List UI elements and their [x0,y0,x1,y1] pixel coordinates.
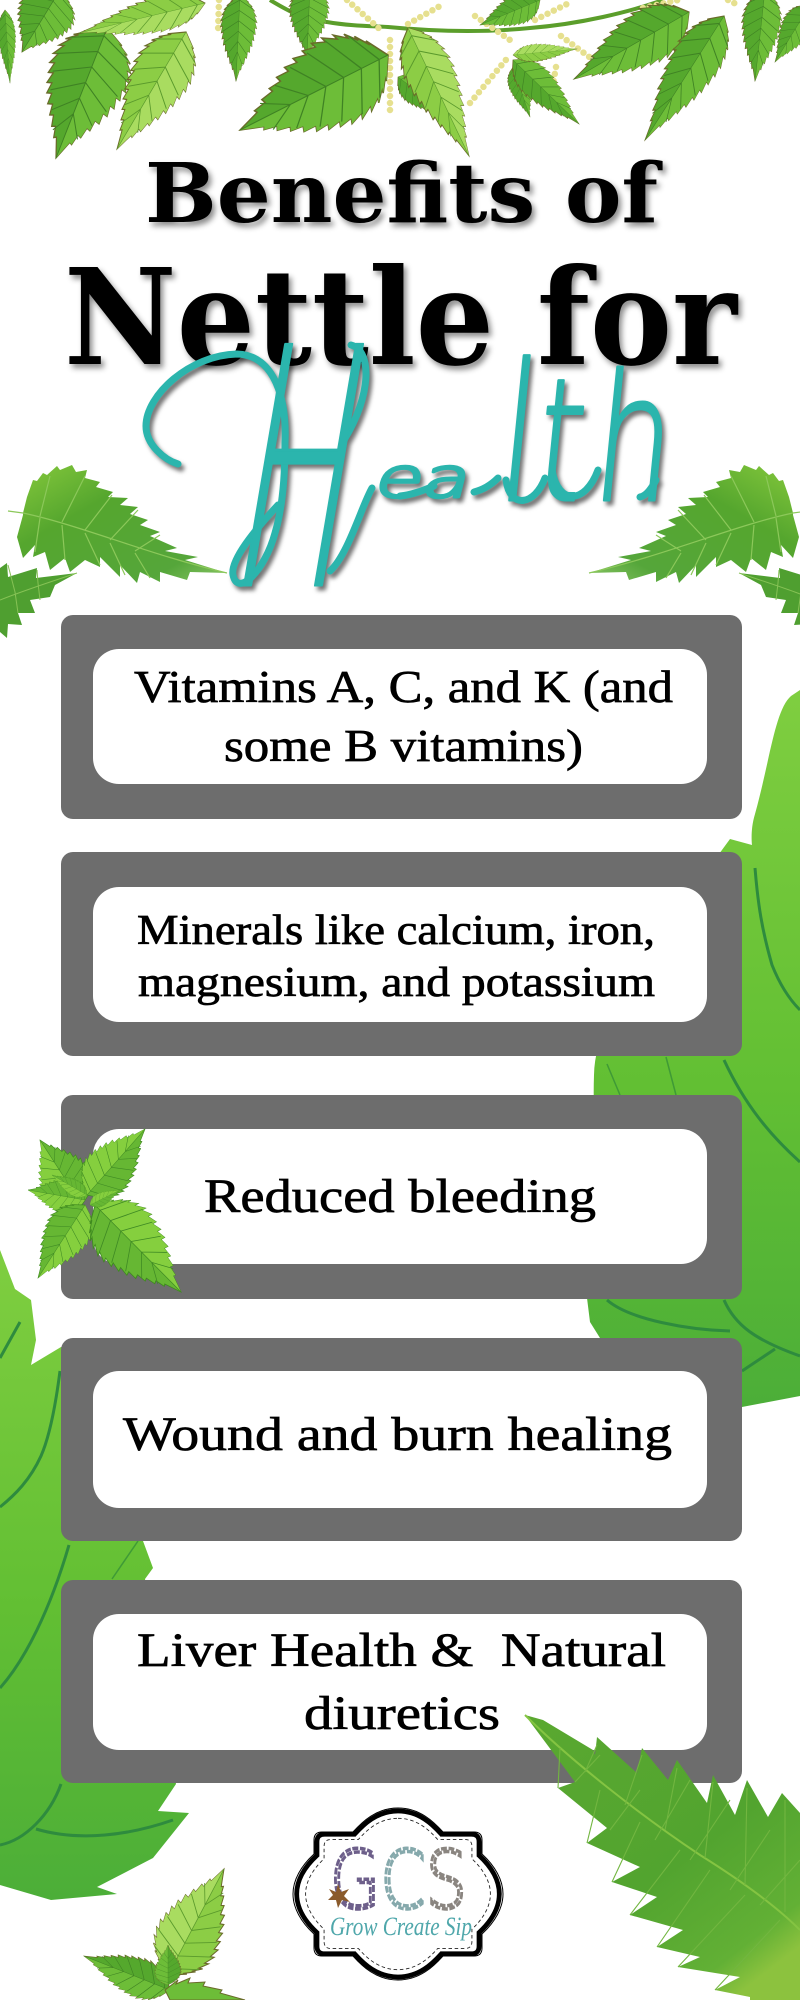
panel: liver health: diuretics [304,1687,500,1740]
panel: vitamins [61,615,742,819]
badge dashed ring [306,1818,490,1970]
side nettle leaves: right [589,465,800,638]
panel: wound healing [61,1338,742,1541]
logo tagline: Grow Create Sip [330,1912,472,1941]
side nettle leaves: left [0,465,227,638]
panel: minerals: Minerals like calcium, iron, [137,908,655,954]
big flat leaf: left [0,1250,189,1900]
top garland of nettle leaves [0,0,800,173]
panel: reduced bleeding: Reduced bleeding [204,1170,596,1223]
panel: minerals: magnesium, and potassium [138,960,655,1006]
panel: vitamins: Vitamins A, C, and K (and [134,661,673,712]
panel: reduced bleeding [61,1095,742,1299]
title line: Nettle for: Nettle for [64,240,739,396]
ea: ea [369,446,480,510]
badge thick ring [297,1811,499,1977]
stem [270,0,663,31]
script word: Health [146,279,685,663]
flower clusters [218,0,738,115]
mint sprig: bottom left [77,1854,253,2000]
photo nettle leaf: bottom right [525,1715,800,2000]
logo badge: Grow Create Sip [293,1808,503,1980]
panel: vitamins: some B vitamins) [224,720,583,771]
H: H [212,279,394,663]
icon: star anise [328,1884,350,1908]
title line: Benefits of: Benefits of [145,146,663,242]
panel: wound healing: Wound and burn healing [123,1408,672,1461]
logo letters: GCS [330,1834,467,1927]
icon: mint sprig on panel 3 [17,1112,205,1316]
decorative swashes [146,345,656,583]
title [64,146,739,396]
big flat leaf: right [587,690,800,1407]
panel: liver health [61,1580,742,1783]
lth: t [529,342,595,540]
lth: h [586,337,684,542]
lth: l [490,323,549,545]
panel: minerals [61,852,742,1056]
badge outer outline [293,1808,503,1980]
panel: liver health: Liver Health & Natural [137,1624,666,1677]
